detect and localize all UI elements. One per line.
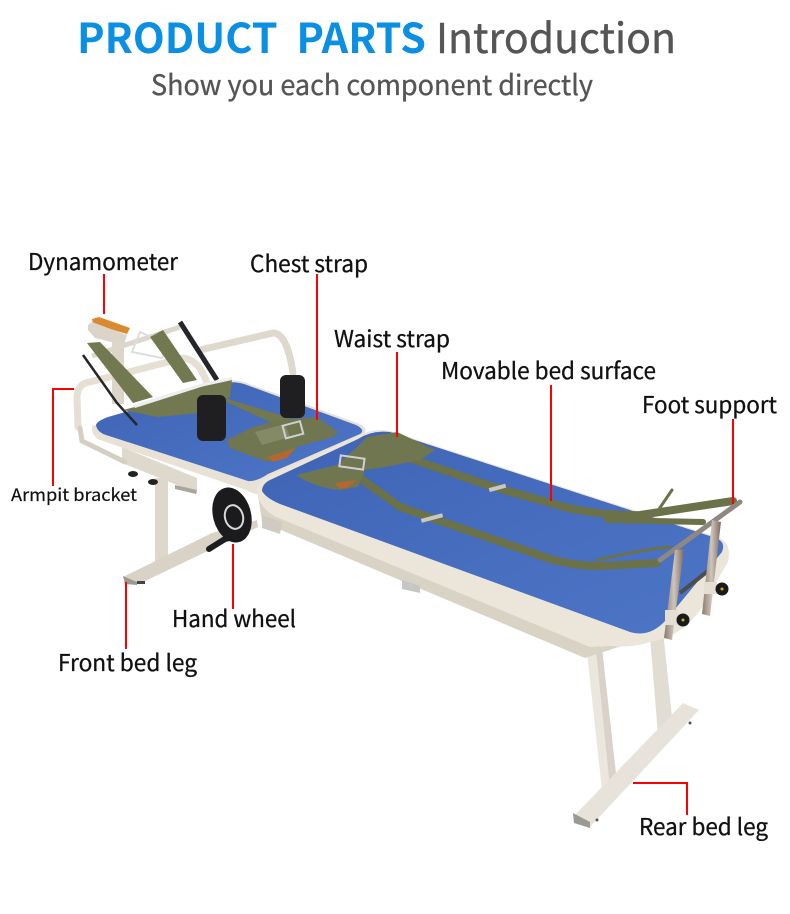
waist strap	[296, 432, 435, 490]
armpit bracket tubes	[77, 333, 293, 462]
green shoulder straps	[87, 330, 290, 428]
title	[77, 5, 676, 65]
label: Rear bed leg	[633, 783, 768, 842]
label: Front bed leg: Front bed leg	[58, 644, 197, 678]
label: Rear bed leg: Rear bed leg	[639, 808, 768, 842]
rear bed leg	[573, 630, 699, 828]
long straps	[360, 455, 733, 566]
title: PRODUCT PARTS	[77, 5, 426, 65]
label: Foot support: Foot support	[642, 386, 777, 420]
strap buckles	[421, 484, 506, 523]
foot support bars	[660, 502, 740, 640]
label: Chest strap: Chest strap	[250, 245, 368, 279]
foot section frame	[257, 430, 729, 647]
label: Hand wheel: Hand wheel	[172, 600, 296, 634]
label: Hand wheel	[172, 544, 296, 634]
foot section blue surface	[262, 432, 723, 634]
head section blue surface	[96, 382, 362, 481]
product illustration: traction bed	[77, 317, 740, 828]
title: Introduction	[436, 5, 676, 65]
chest strap	[227, 417, 338, 462]
label: Foot support	[642, 386, 777, 504]
label: Waist strap: Waist strap	[334, 320, 450, 354]
head underside box	[122, 447, 197, 493]
label: Dynamometer: Dynamometer	[28, 243, 178, 277]
label: Waist strap	[334, 320, 450, 437]
subtitle: Show you each component directly	[151, 64, 593, 104]
label: Front bed leg	[58, 582, 197, 678]
head section frame	[92, 380, 366, 494]
foot frame apron	[258, 495, 640, 658]
label: Armpit bracket: Armpit bracket	[11, 481, 138, 506]
front bed leg	[123, 478, 258, 585]
label: Armpit bracket	[11, 389, 138, 506]
armpit pads	[197, 375, 305, 441]
hand wheel	[206, 483, 258, 549]
label: Movable bed surface: Movable bed surface	[441, 352, 656, 386]
dynamometer	[83, 317, 217, 425]
